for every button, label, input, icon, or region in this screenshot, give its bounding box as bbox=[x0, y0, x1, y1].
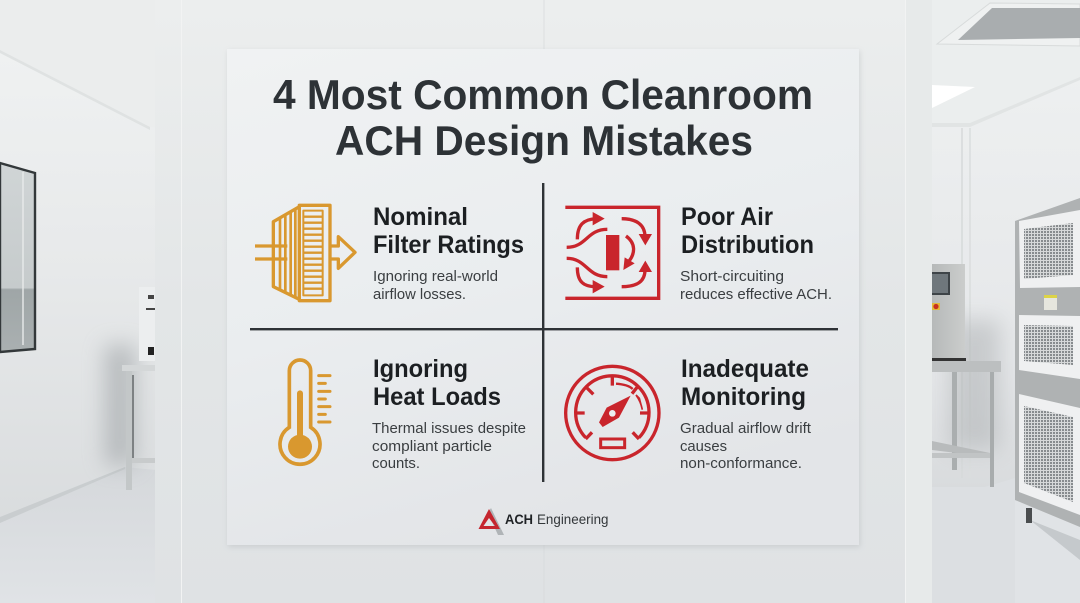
panel: ignoring heat loads bbox=[280, 355, 526, 472]
vertical divider bbox=[542, 183, 544, 482]
icon: thermometer bbox=[280, 360, 330, 464]
background: wall pillar bbox=[155, 0, 932, 603]
background: left room bbox=[0, 0, 156, 603]
description: compliant particle bbox=[372, 439, 492, 455]
logo wordmark: ACH bbox=[505, 511, 533, 527]
icon: logo triangle bbox=[478, 508, 504, 535]
logo wordmark: Engineering bbox=[537, 511, 608, 527]
panel: poor air distribution bbox=[565, 203, 832, 303]
poster panel bbox=[227, 49, 860, 547]
icon: recirculating airflow bbox=[565, 207, 659, 298]
description bbox=[680, 421, 811, 472]
heading bbox=[373, 203, 524, 259]
description: Gradual airflow drift bbox=[680, 421, 811, 437]
title bbox=[273, 71, 813, 164]
heading bbox=[681, 355, 809, 411]
description: Short-circuiting bbox=[680, 269, 784, 285]
description: counts. bbox=[372, 456, 420, 472]
heading bbox=[373, 355, 501, 411]
air handling cabinet bbox=[1015, 198, 1080, 527]
panel: nominal filter ratings bbox=[255, 203, 524, 303]
icon: pressure gauge bbox=[566, 366, 659, 460]
description: Thermal issues despite bbox=[372, 421, 526, 437]
ceiling light bbox=[932, 85, 975, 108]
description bbox=[373, 269, 498, 303]
heading: Heat Loads bbox=[373, 383, 501, 411]
description: airflow losses. bbox=[373, 287, 466, 303]
title: 4 Most Common Cleanroom bbox=[273, 71, 813, 118]
description: causes bbox=[680, 439, 727, 455]
logo wordmark bbox=[505, 511, 608, 527]
heading: Distribution bbox=[681, 231, 814, 259]
background: right room bbox=[932, 0, 1080, 603]
heading: Ignoring bbox=[373, 355, 468, 383]
panel: inadequate monitoring bbox=[566, 355, 811, 472]
description bbox=[372, 421, 526, 472]
horizontal divider bbox=[250, 328, 838, 330]
heading: Filter Ratings bbox=[373, 231, 524, 259]
icon: air filter with arrow bbox=[255, 205, 355, 301]
control unit and table bbox=[932, 264, 1001, 487]
ceiling vent bbox=[937, 3, 1080, 46]
heading: Nominal bbox=[373, 203, 468, 231]
title: ACH Design Mistakes bbox=[335, 117, 753, 164]
logo: ACH Engineering bbox=[478, 508, 608, 535]
description bbox=[680, 269, 832, 303]
description: Ignoring real-world bbox=[373, 269, 498, 285]
description: reduces effective ACH. bbox=[680, 287, 832, 303]
heading bbox=[681, 203, 814, 259]
heading: Poor Air bbox=[681, 203, 773, 231]
heading: Monitoring bbox=[681, 383, 806, 411]
description: non-conformance. bbox=[680, 456, 802, 472]
equipment table and unit bbox=[122, 287, 156, 490]
window bbox=[0, 163, 35, 352]
heading: Inadequate bbox=[681, 355, 809, 383]
